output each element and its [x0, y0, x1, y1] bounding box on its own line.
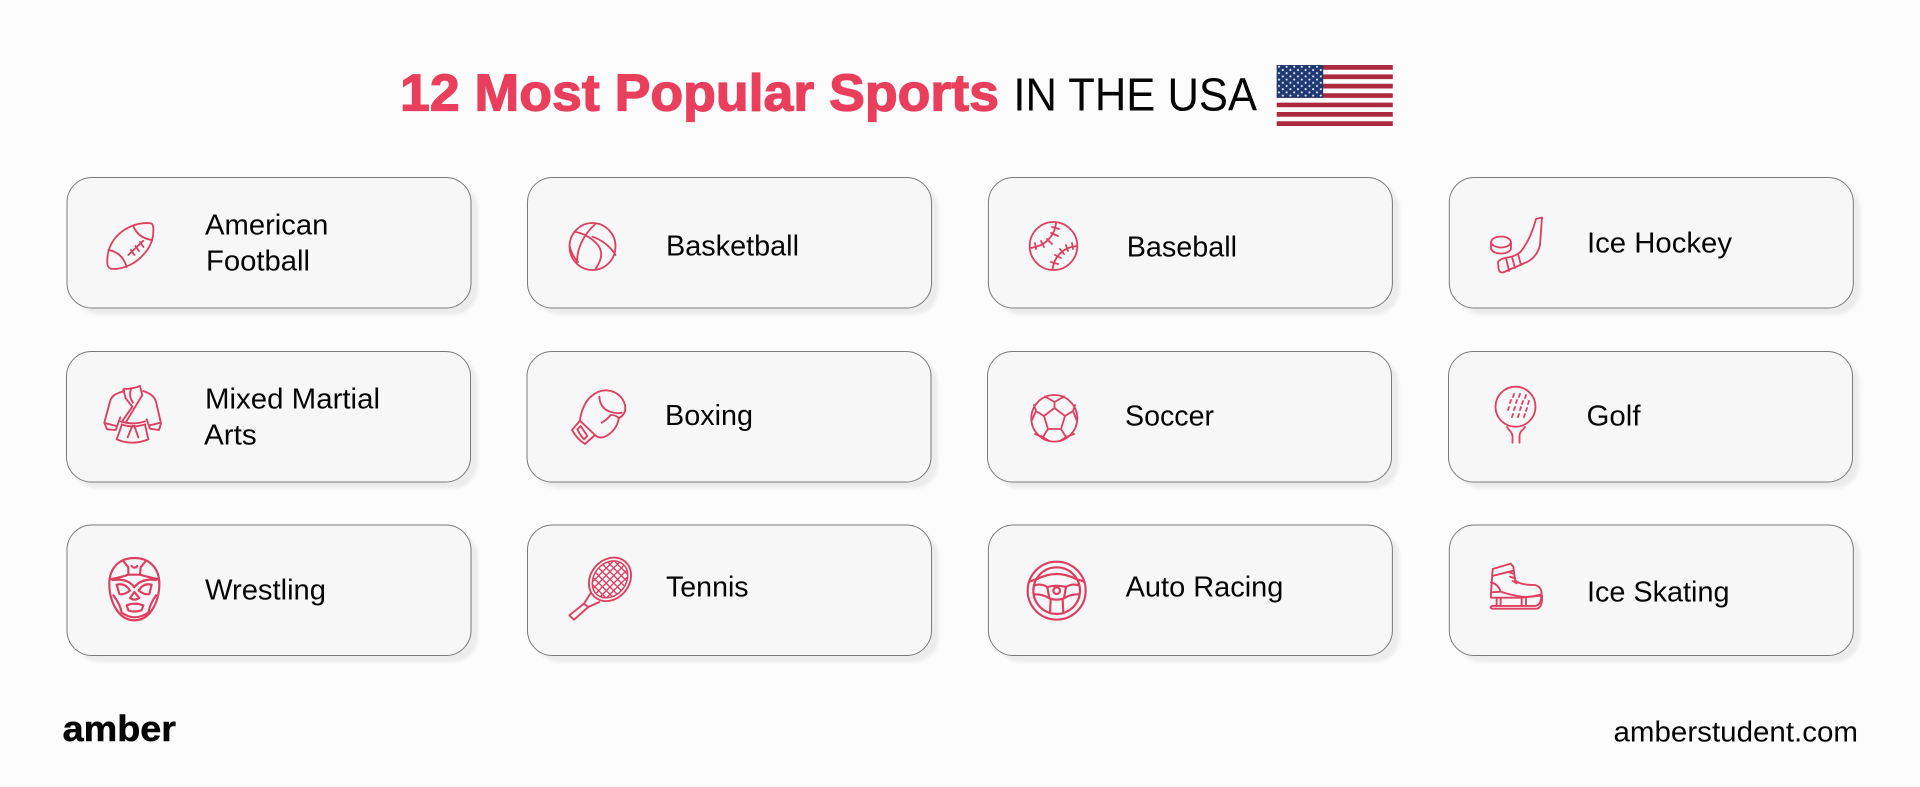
card: Ice Hockey — [1449, 178, 1860, 314]
label: Soccer — [1125, 401, 1214, 433]
card: Mixed Martial Arts — [66, 352, 478, 488]
label: Wrestling — [205, 574, 326, 606]
title: black regular part: IN THE USA — [1013, 69, 1257, 121]
label: Mixed Martial — [205, 383, 380, 415]
icon: steering wheel — [1028, 562, 1086, 620]
label: Basketball — [666, 231, 799, 263]
label — [205, 209, 328, 277]
icon: wrestling mask — [109, 558, 159, 620]
card: Soccer — [988, 352, 1398, 488]
card: Ice Skating — [1449, 525, 1860, 662]
icon: american football — [107, 223, 153, 269]
icon: USA flag — [1277, 65, 1393, 126]
card: Golf — [1448, 352, 1860, 488]
icon: baseball — [1030, 222, 1077, 270]
icon: ice skate — [1491, 564, 1542, 609]
icon: tennis racket — [568, 556, 632, 621]
icon: martial arts gi — [104, 386, 161, 443]
label — [204, 383, 380, 451]
card: Basketball — [528, 178, 938, 314]
icon: soccer ball — [1031, 395, 1077, 442]
label: Football — [206, 245, 310, 277]
card: Baseball — [988, 178, 1399, 314]
card: Boxing — [527, 352, 938, 488]
label: Boxing — [665, 400, 753, 432]
label: American — [205, 209, 328, 241]
title: red bold part: 12 Most Popular Sports — [400, 65, 999, 123]
icon: hockey stick and puck — [1491, 218, 1542, 273]
card: Tennis — [528, 525, 938, 662]
website url: amberstudent.com — [1614, 717, 1858, 749]
label: Golf — [1586, 401, 1641, 433]
label: Ice Hockey — [1587, 228, 1732, 260]
icon: golf ball on tee — [1496, 387, 1536, 443]
title — [400, 65, 1257, 123]
card: Wrestling — [67, 525, 478, 662]
label: Ice Skating — [1587, 577, 1730, 609]
icon: boxing glove — [572, 390, 625, 444]
card: American Football — [67, 178, 478, 314]
label: Tennis — [666, 572, 749, 604]
card: Auto Racing — [988, 525, 1399, 662]
icon: basketball — [570, 223, 616, 270]
label: Arts — [204, 419, 257, 451]
label: Auto Racing — [1126, 572, 1283, 604]
label: Baseball — [1127, 232, 1237, 264]
logo: amber: amber — [63, 708, 176, 749]
